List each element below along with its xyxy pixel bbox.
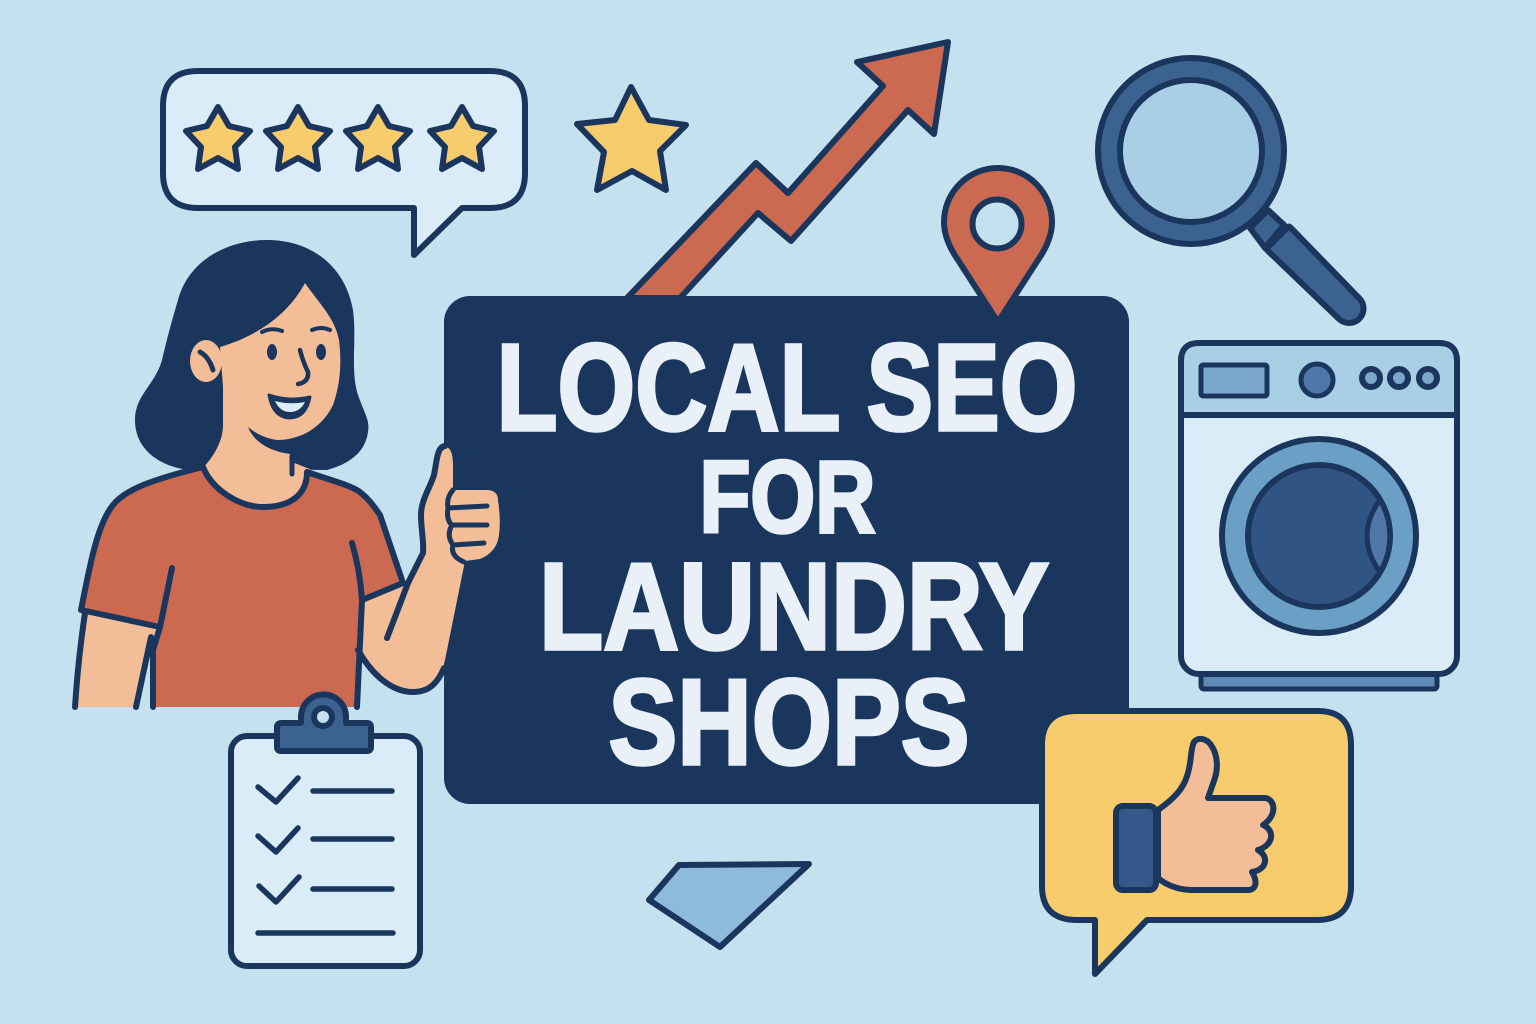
raised arm and fist (358, 447, 500, 692)
icon: washing machine (1181, 343, 1457, 689)
nose (298, 350, 308, 384)
title: FOR (700, 440, 876, 554)
icon: large star (577, 87, 686, 190)
ear (190, 340, 222, 382)
panel: title board (444, 296, 1129, 804)
hair (135, 240, 368, 470)
icon: cuff (1116, 806, 1156, 890)
icon: rating star 4 (430, 107, 494, 169)
speech bubble: star rating (163, 71, 525, 255)
title: SHOPS (608, 654, 970, 790)
title (496, 320, 1078, 790)
icon: rating star 1 (186, 107, 250, 169)
face and neck (198, 283, 340, 518)
left arm (75, 613, 160, 707)
neck crease (290, 456, 294, 474)
person: woman giving thumbs up (75, 240, 500, 707)
icon: clipboard checklist (231, 694, 420, 966)
icon: rating star 2 (266, 107, 330, 169)
title: LAUNDRY (539, 539, 1049, 676)
title: LOCAL SEO (496, 320, 1078, 457)
eyes (267, 344, 326, 360)
speech bubble: thumbs up (1042, 711, 1351, 974)
clip (277, 694, 371, 751)
smile (269, 395, 310, 418)
shirt and arm outlines (81, 446, 445, 707)
check items (258, 778, 393, 933)
eyebrows (262, 328, 330, 332)
fingers (448, 490, 487, 562)
icon: rising arrow (627, 42, 948, 298)
icon: rating star 3 (346, 107, 410, 169)
icon: thumb hand (1158, 739, 1273, 890)
icon: magnifying glass (1098, 58, 1364, 323)
shirt (81, 467, 403, 707)
icon: map pin (944, 168, 1052, 322)
icon: blue gem shape (649, 864, 809, 947)
